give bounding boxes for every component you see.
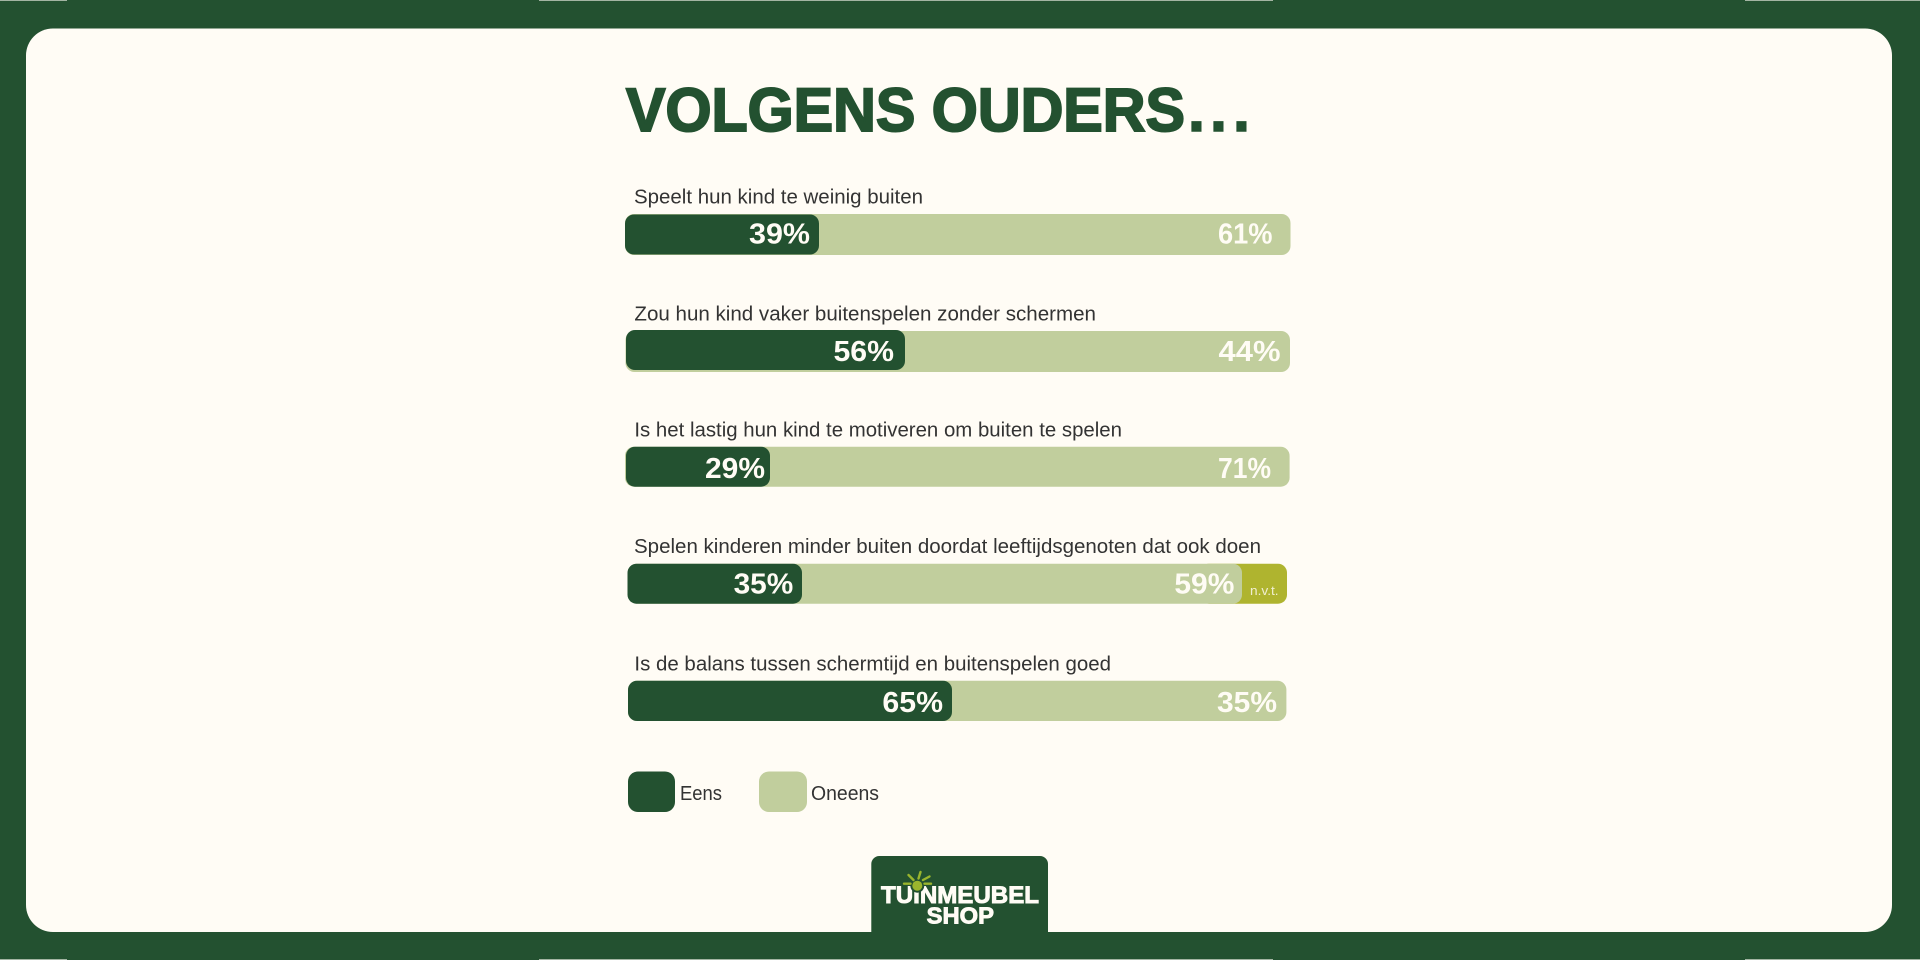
bar not applicable [1200,564,1287,604]
value 65%: 65% [882,687,943,719]
icon: sun [904,872,931,893]
row 5: balans schermtijd [628,654,1286,721]
bar disagree 71% [625,447,1290,487]
bar disagree 61% [625,214,1290,255]
logo: Tuinmeubel Shop [871,856,1048,934]
value n.v.t.: n.v.t. [1250,583,1279,598]
logo wordmark top: TUINMEUBEL [881,882,1039,909]
bar agree 56% [626,330,905,370]
value 61%: 61% [1218,218,1272,250]
value 71%: 71% [1218,453,1271,485]
row 3: lastig te motiveren [625,420,1290,487]
bar agree 35% [628,564,802,604]
label row 3: Is het lastig hun kind te motiveren om buiten te spelen [634,420,1122,442]
legend swatch: Eens [628,772,675,812]
value 35%: 35% [734,569,793,601]
value 39%: 39% [749,218,810,250]
value 44%: 44% [1218,336,1280,368]
label row 5: Is de balans tussen schermtijd en buitenspelen goed [634,654,1111,676]
bar disagree 59% [628,564,1242,604]
label row 4: Spelen kinderen minder buiten doordat leeftijdsgenoten dat ook doen [634,536,1261,558]
value 56%: 56% [834,336,894,368]
legend [628,772,879,812]
value 59%: 59% [1174,569,1234,601]
bar agree 65% [628,681,952,721]
bar agree 39% [625,214,819,254]
label row 2: Zou hun kind vaker buitenspelen zonder schermen [634,304,1096,326]
title: ... [1188,76,1250,144]
row 4: leeftijdsgenoten [628,536,1287,604]
value 35%: 35% [1217,687,1277,719]
label row 1: Speelt hun kind te weinig buiten [634,186,923,208]
bar disagree 44% [626,331,1290,372]
row 1: te weinig buiten [625,186,1290,255]
row 2: zonder schermen [626,304,1290,372]
value 29%: 29% [705,453,765,485]
legend swatch: Oneens [759,772,807,812]
legend label: Eens: Eens [680,783,722,805]
logo wordmark bottom: SHOP [927,902,994,928]
title: VOLGENS OUDERS [626,76,1185,144]
logo tab [871,856,1048,934]
bar disagree 35% [628,681,1286,721]
legend label: Oneens: Oneens [811,783,879,805]
bar agree 29% [626,447,770,487]
